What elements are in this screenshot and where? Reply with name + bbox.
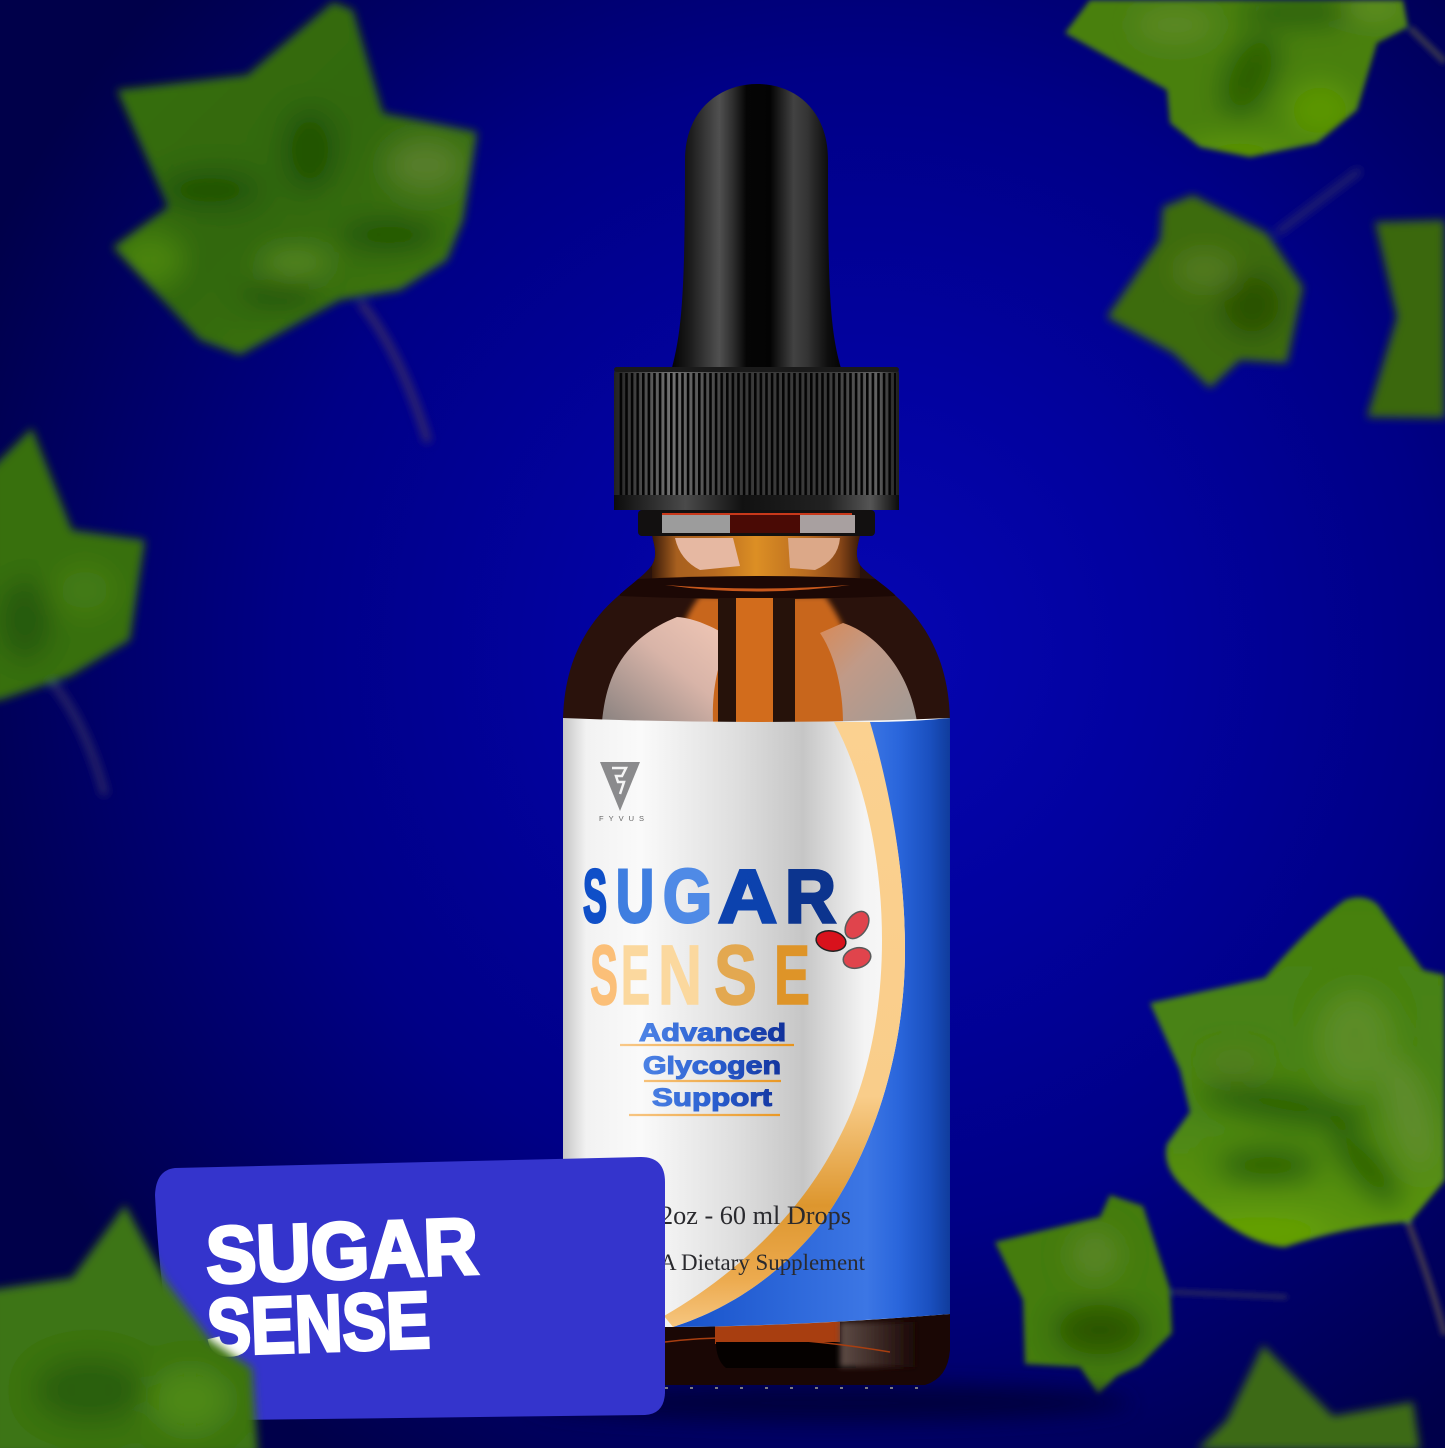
card title: SUGAR — [204, 1202, 479, 1300]
leaf: bottom right — [1197, 1345, 1420, 1448]
label tagline: Advanced — [639, 1019, 786, 1047]
label title: sugar: A — [718, 854, 777, 938]
leaf: bottom left foreground — [0, 1205, 258, 1448]
dropper collar — [614, 367, 899, 510]
product card — [155, 1157, 665, 1420]
label title: sense — [590, 928, 810, 1022]
bottle shadow — [530, 1383, 1130, 1423]
blue swoosh — [673, 718, 950, 1327]
glass shoulder — [563, 536, 950, 722]
label title: sugar — [583, 854, 836, 938]
leaf: mid left — [0, 428, 145, 795]
label title: sugar: S — [583, 854, 607, 938]
leaf: top right — [1065, 0, 1445, 164]
label title: sense: S — [590, 928, 618, 1022]
label title: sugar: R — [785, 854, 836, 938]
label small print: A Dietary Supplement — [660, 1250, 866, 1275]
neck ring — [638, 510, 875, 536]
label tagline — [620, 1019, 794, 1115]
label title: sense: S — [714, 928, 757, 1022]
gold swoosh — [664, 722, 905, 1327]
label small print: 2oz - 60 ml Drops — [660, 1201, 851, 1230]
bottle — [555, 84, 955, 1388]
label tagline: Support — [652, 1084, 773, 1112]
leaf: lower right — [1150, 897, 1445, 1335]
icon: red blood cells — [814, 907, 874, 971]
dropper bulb — [672, 84, 841, 368]
card title — [204, 1202, 479, 1372]
brand logo: FYVUS — [599, 814, 649, 823]
brand logo — [599, 762, 649, 823]
label title: sugar: G — [663, 854, 712, 938]
label — [563, 718, 950, 1327]
leaf: mid right — [1107, 170, 1360, 388]
label title: sense: N — [658, 928, 702, 1022]
label title: sugar: U — [616, 854, 654, 938]
leaf: top left — [113, 2, 477, 442]
card title: SENSE — [205, 1275, 431, 1372]
label tagline: Glycogen — [643, 1052, 781, 1080]
glass base — [600, 1310, 950, 1388]
leaf: far right — [1367, 220, 1445, 418]
label title: sense: E — [621, 928, 650, 1022]
label title: sense: E — [774, 928, 810, 1022]
leaf: bottom right center — [995, 1195, 1287, 1394]
label small print — [660, 1201, 866, 1275]
